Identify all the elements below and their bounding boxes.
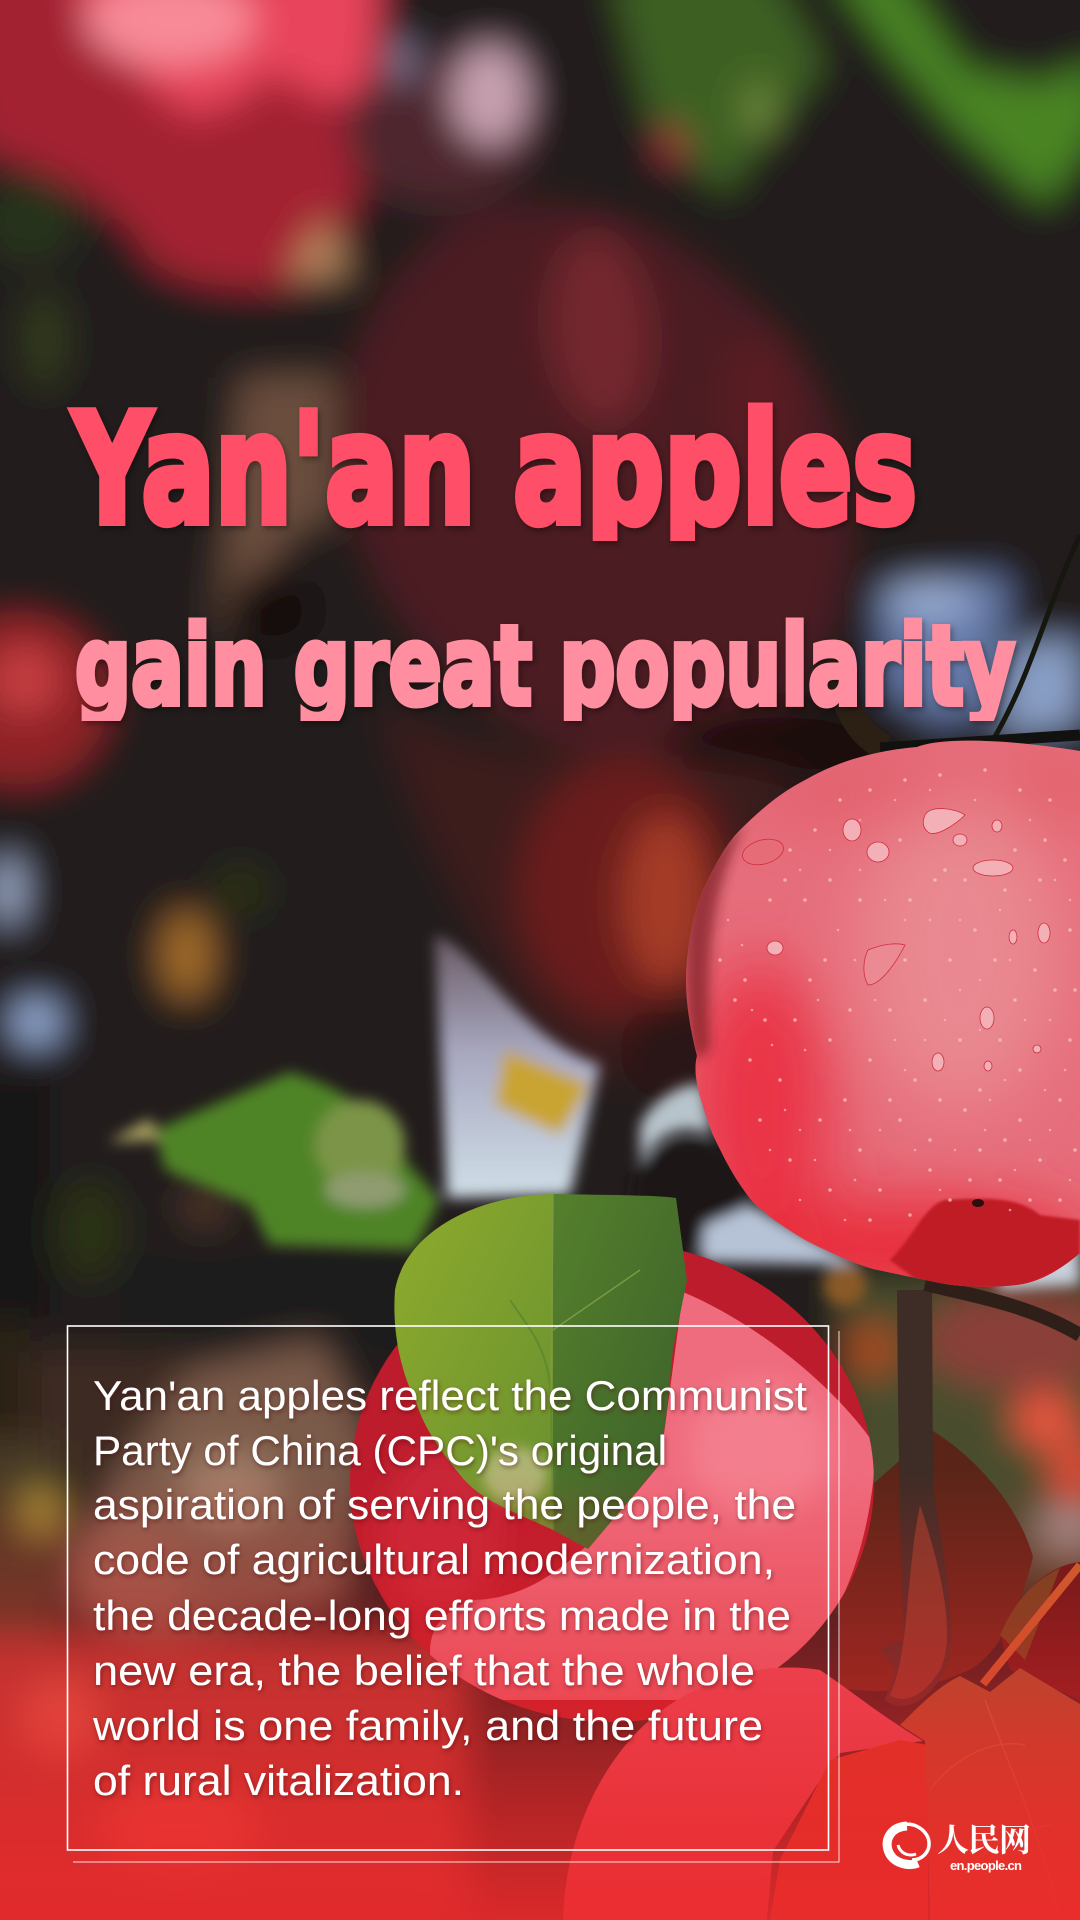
logo: People's Daily Online: en.people.cn (950, 1858, 1022, 1873)
sky patch (435, 935, 600, 1198)
bottom right leaf (770, 1668, 1080, 1920)
small water beads (720, 770, 1075, 1220)
central lower apple (380, 700, 800, 1086)
body paragraph: code of agricultural modernization, (93, 1536, 775, 1583)
dark red leaf behind lower right (840, 1431, 1080, 1700)
foreground apple: bottom (563, 1667, 923, 1920)
lower-left background (0, 1320, 30, 1440)
dark under leaf (120, 1255, 400, 1350)
body paragraph (92, 1372, 807, 1804)
blurred green leaf (155, 1072, 440, 1250)
stems and branches upper (839, 535, 1080, 748)
left column bokeh (0, 856, 22, 924)
large dim apple in center (344, 207, 850, 760)
red gradient overlay at bottom (0, 1470, 1080, 1920)
right dark with sky (880, 575, 1010, 735)
logo: People's Daily Online (887, 1815, 1031, 1873)
beige gaps (285, 215, 350, 278)
blurred apple top left (0, 0, 385, 287)
upper green leaves (610, 0, 825, 195)
body paragraph: Party of China (CPC)'s original (93, 1427, 667, 1474)
icon: swirl emblem (887, 1824, 929, 1864)
body paragraph: new era, the belief that the whole (93, 1647, 755, 1694)
body paragraph: Yan'an apples reflect the Communist (93, 1372, 807, 1419)
title (72, 381, 1015, 730)
body paragraph: the decade-long efforts made in the (93, 1592, 791, 1639)
text panel frame (68, 1326, 839, 1862)
logo: People's Daily Online: 人民网 (937, 1815, 1031, 1861)
apple shading (690, 760, 1080, 1300)
water droplets (740, 809, 1050, 1071)
sky slivers behind main apple (640, 1084, 712, 1165)
foreground apple: lower center (340, 1230, 880, 1730)
lower branch (880, 1284, 1080, 1706)
sharp green leaf (394, 1194, 687, 1549)
body paragraph: world is one family, and the future (92, 1702, 763, 1749)
body paragraph: aspiration of serving the people, the (93, 1481, 796, 1528)
dark under title (670, 705, 890, 785)
sharper background elements (108, 935, 1080, 1307)
lower-right background (840, 1280, 1080, 1590)
pink bokeh (345, 55, 535, 205)
left red apple bokeh (0, 615, 108, 785)
body paragraph: of rural vitalization. (93, 1757, 464, 1804)
left olive shapes (0, 175, 80, 265)
main apple in focus (680, 730, 1080, 1300)
